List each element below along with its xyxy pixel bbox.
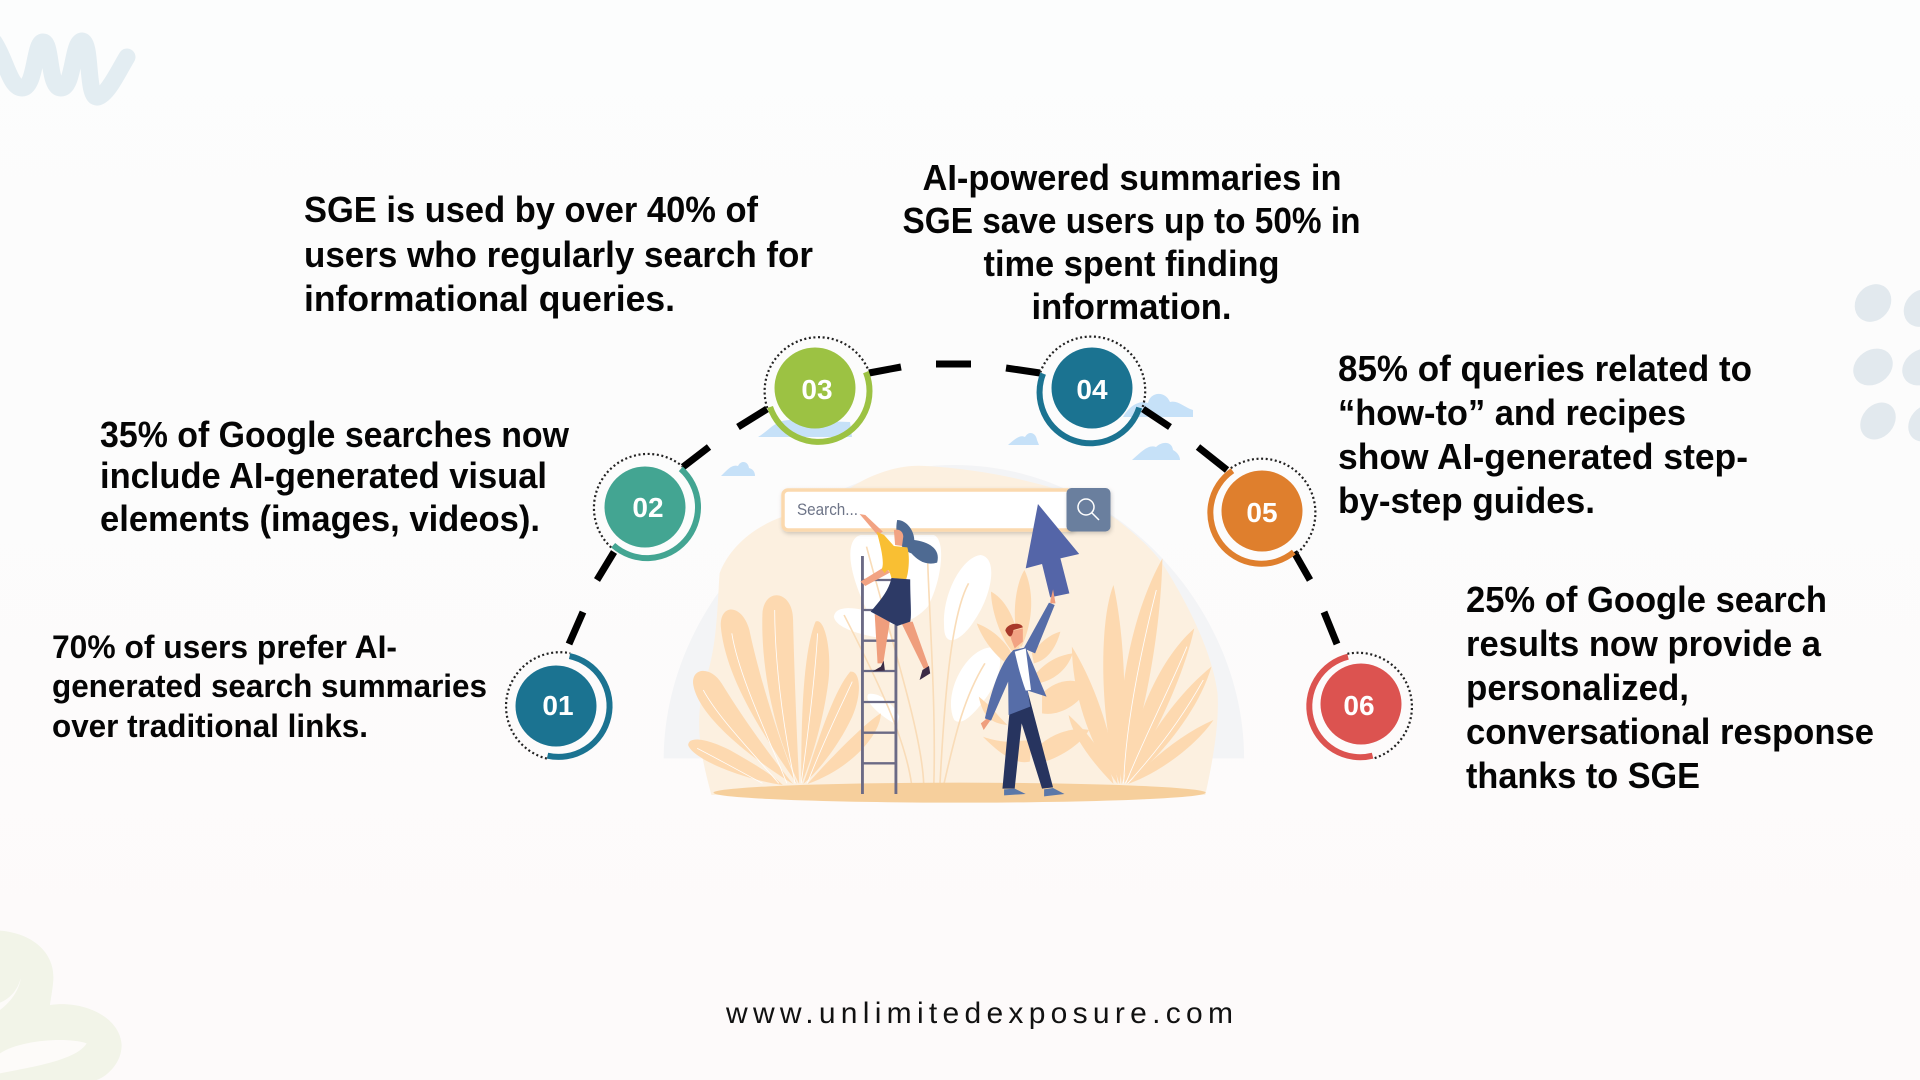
- text: stat 05: [1338, 348, 1752, 521]
- step marker 05: [1210, 459, 1315, 564]
- text: stat 01: [52, 629, 487, 744]
- text: stat 06: thanks to SGE: [1466, 755, 1700, 796]
- text: stat 03: SGE is used by over 40% of: [304, 189, 759, 230]
- decoration: right-edge dots: [1846, 277, 1920, 449]
- step marker 05: 05: [1246, 497, 1278, 528]
- step marker 03: [765, 337, 869, 442]
- clouds: [721, 394, 1193, 476]
- search placeholder: Search...: [797, 500, 858, 519]
- text: stat 02: include AI-generated visual: [100, 455, 547, 496]
- decoration: bottom-left leaf blob: [0, 931, 122, 1080]
- step marker 04: [1040, 337, 1145, 443]
- peach fan behind man: [977, 570, 1089, 763]
- text: stat 05: by-step guides.: [1338, 480, 1595, 521]
- white leaves: [850, 535, 941, 624]
- step marker 01: 01: [542, 690, 574, 721]
- woman: [860, 514, 938, 680]
- grey dome: [664, 465, 1244, 758]
- text: stat 04: AI-powered summaries in: [922, 157, 1342, 198]
- text: stat 01: 70% of users prefer AI-: [52, 629, 397, 665]
- text: stat 06: conversational response: [1466, 711, 1874, 752]
- text: stat 03: [304, 189, 813, 319]
- text: stat 06: 25% of Google search: [1466, 579, 1827, 620]
- man: [981, 589, 1064, 796]
- text: stat 03: users who regularly search for: [304, 234, 813, 275]
- search button: [1066, 488, 1110, 532]
- dashed arc connector: [569, 364, 1337, 644]
- step marker 03: 03: [801, 374, 833, 405]
- decoration: top-left squiggle: [0, 41, 127, 97]
- text: stat 01: generated search summaries: [52, 668, 487, 704]
- text: stat 03: informational queries.: [304, 278, 675, 319]
- step marker 04: 04: [1076, 374, 1108, 405]
- ladder: [862, 556, 896, 794]
- text: stat 02: elements (images, videos).: [100, 498, 540, 539]
- peach blob: [699, 466, 1218, 795]
- arrow: [1026, 504, 1079, 597]
- search bar: [783, 488, 1110, 532]
- step marker 01: [506, 652, 610, 759]
- step marker 02: [594, 454, 698, 558]
- step marker 06: [1309, 653, 1412, 758]
- step marker 06: 06: [1343, 690, 1375, 721]
- right spiky plant: [1069, 558, 1213, 784]
- step marker 02: 02: [632, 492, 664, 523]
- text: stat 01: over traditional links.: [52, 708, 368, 744]
- text: stat 02: [100, 414, 570, 539]
- text: stat 05: show AI-generated step-: [1338, 436, 1748, 477]
- text: stat 06: personalized,: [1466, 667, 1689, 708]
- text: stat 06: results now provide a: [1466, 623, 1822, 664]
- text: stat 05: “how-to” and recipes: [1338, 392, 1686, 433]
- text: stat 02: 35% of Google searches now: [100, 414, 570, 455]
- text: stat 06: [1466, 579, 1874, 796]
- text: stat 05: 85% of queries related to: [1338, 348, 1752, 389]
- text: stat 04: time spent finding: [984, 243, 1280, 284]
- footer: website: www.unlimitedexposure.com: [725, 997, 1233, 1030]
- left fan plant: [688, 595, 881, 785]
- centre stems: [867, 547, 924, 783]
- ground shadow: [713, 783, 1206, 803]
- text: stat 04: information.: [1032, 286, 1232, 327]
- text: stat 04: [902, 157, 1360, 327]
- text: stat 04: SGE save users up to 50% in: [902, 200, 1360, 241]
- illustration: search scene: [664, 394, 1244, 803]
